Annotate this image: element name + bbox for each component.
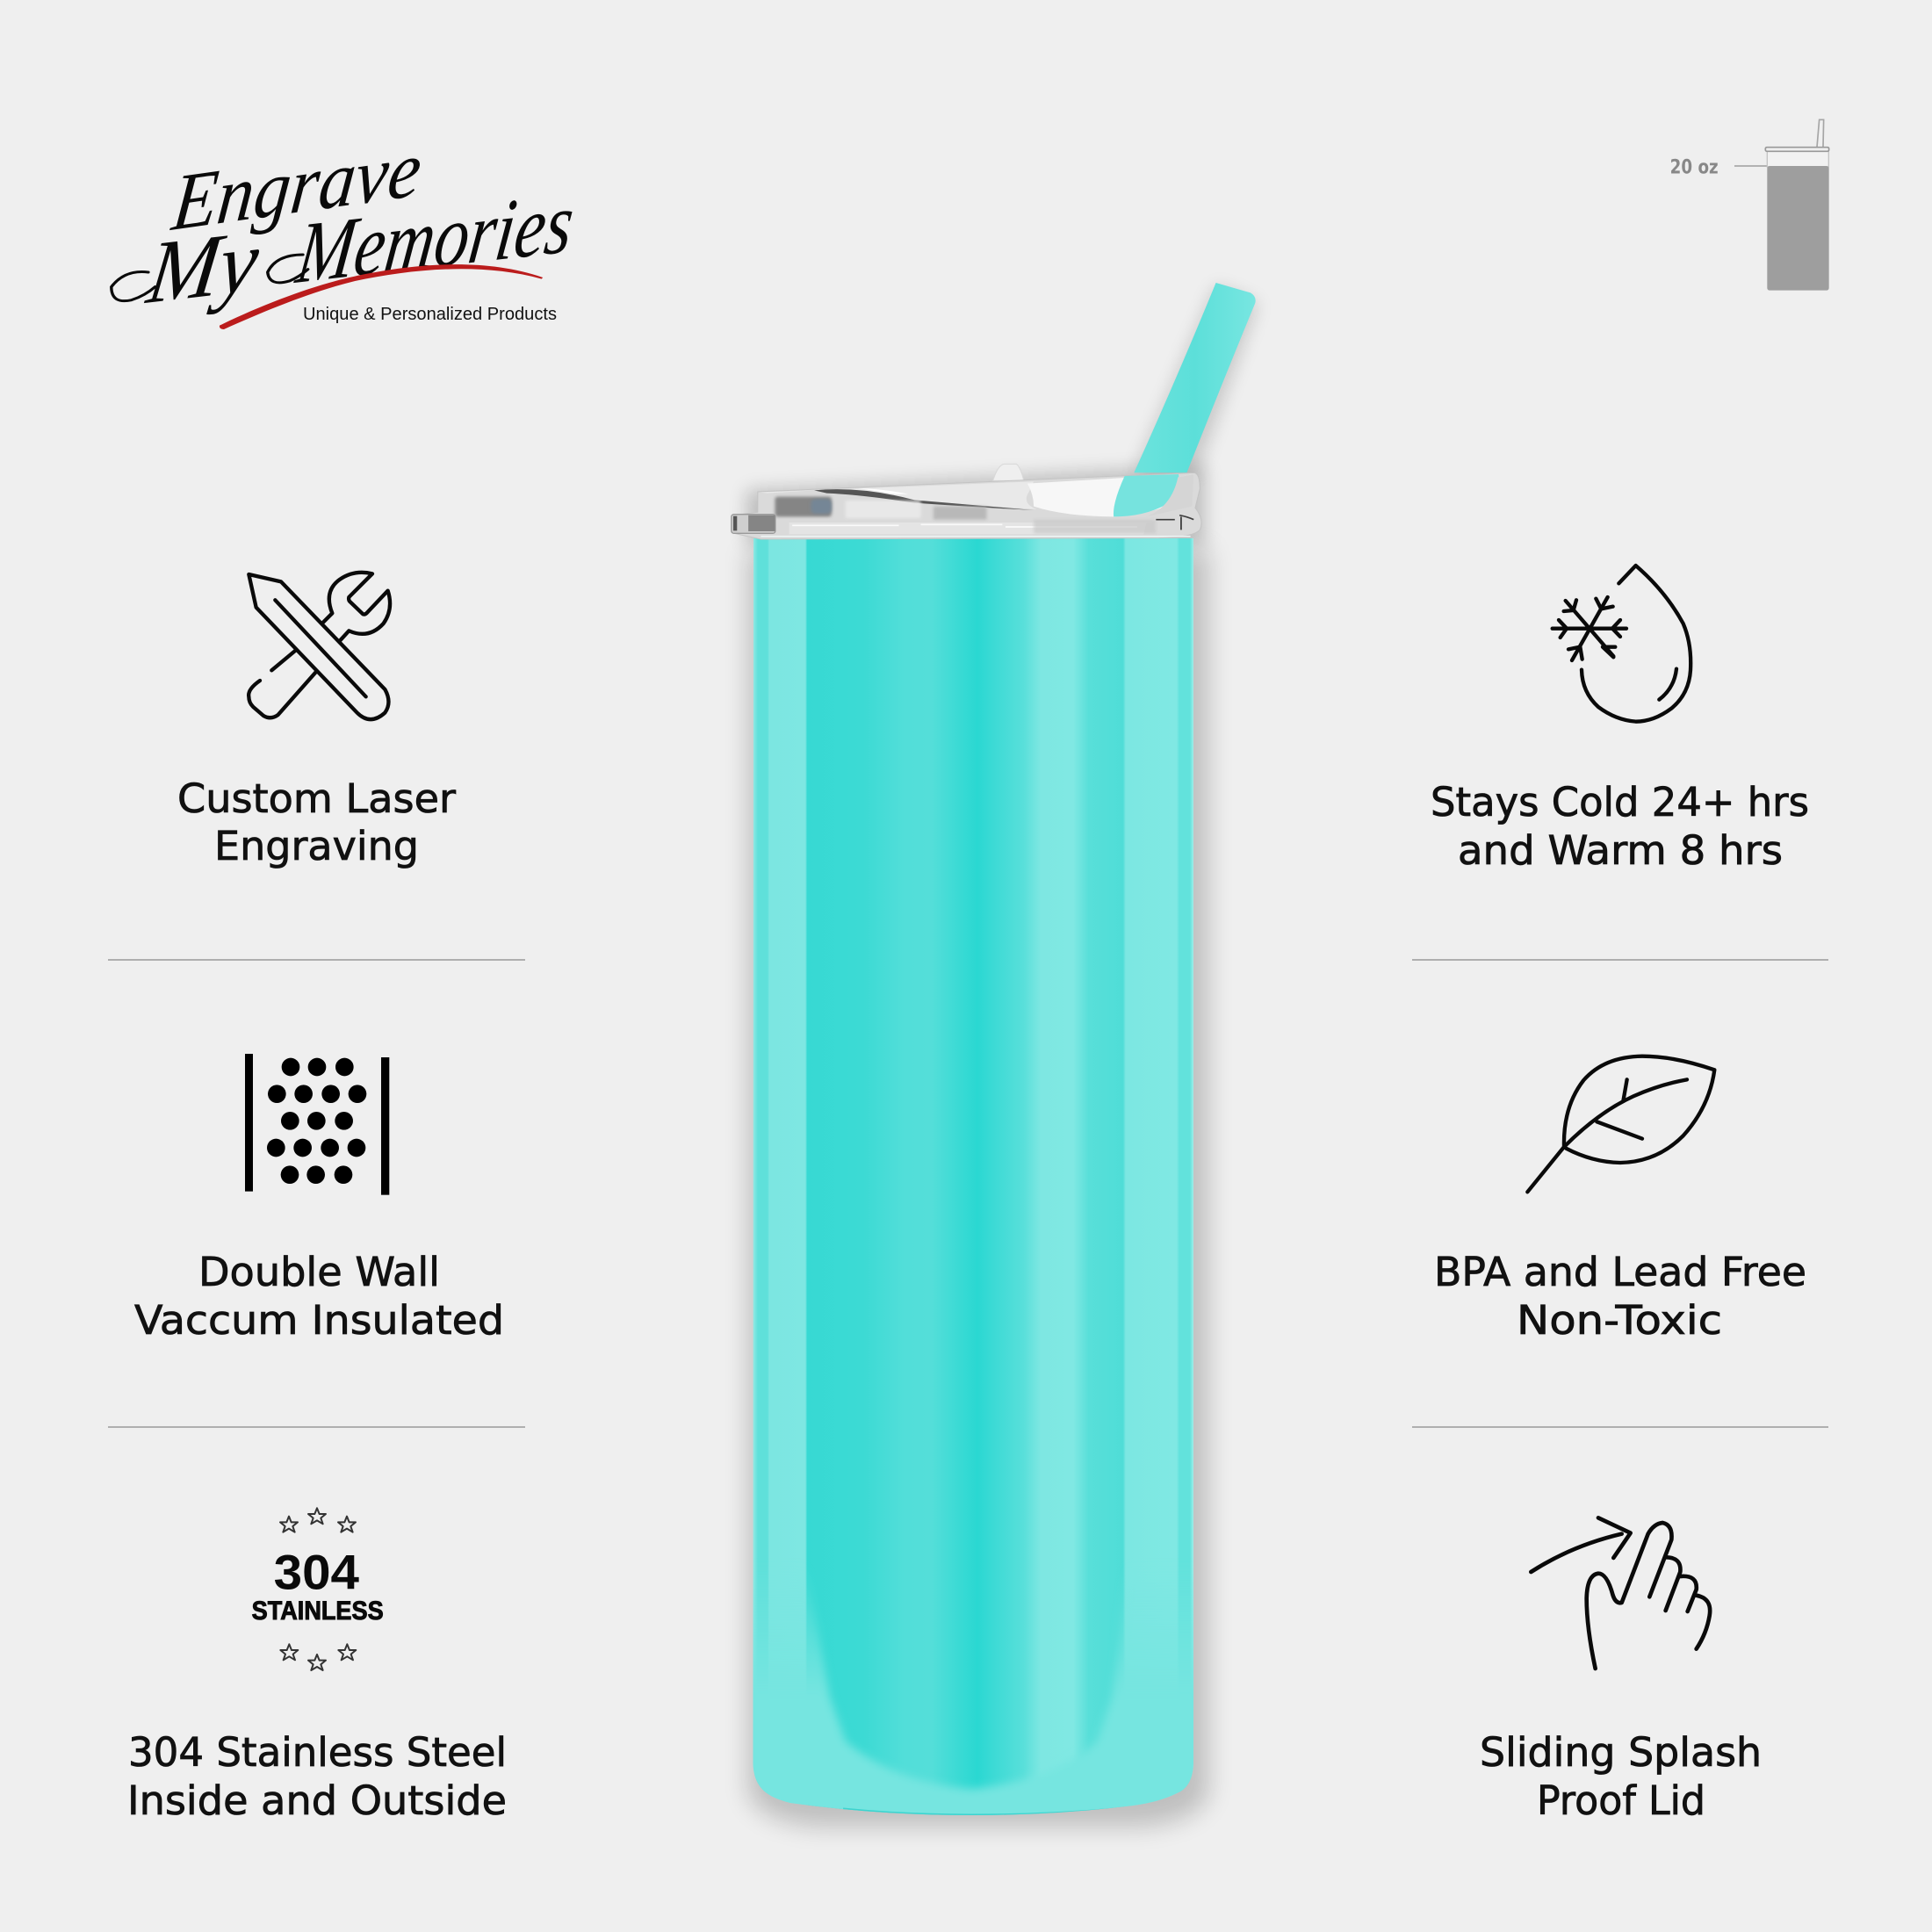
feature text: and Warm 8 hrs (1458, 827, 1783, 874)
badge stars (280, 1508, 356, 1670)
lid shell (732, 472, 1201, 539)
panel: temperature retention (1431, 566, 1809, 874)
feature text: Stays Cold 24+ hrs (1431, 779, 1809, 825)
feature text: Engraving (214, 823, 419, 869)
logo word: Memories: Memories (291, 173, 580, 302)
logo flourishes (112, 255, 308, 301)
feature text: Non-Toxic (1517, 1297, 1722, 1344)
lid pull tab (732, 515, 775, 533)
icon: 304 stainless badge (252, 1508, 384, 1670)
red swoosh (220, 264, 543, 329)
feature text: BPA and Lead Free (1434, 1249, 1806, 1295)
feature text: Vaccum Insulated (134, 1297, 504, 1344)
icon: crossed tools (249, 573, 390, 719)
feature text (1431, 779, 1809, 874)
panel: custom laser engraving (177, 573, 457, 869)
logo word: Engrave: Engrave (167, 124, 426, 248)
size label: 20 oz (1670, 157, 1719, 179)
panel: BPA and lead free (1434, 1056, 1806, 1344)
feature text: Inside and Outside (127, 1777, 507, 1824)
feature text: Sliding Splash (1480, 1729, 1762, 1776)
badge word: STAINLESS (252, 1597, 384, 1626)
feature text: 304 Stainless Steel (128, 1729, 507, 1776)
brand logo (112, 124, 580, 329)
feature text (127, 1729, 507, 1824)
infographic canvas (108, 119, 1830, 1838)
feature text (134, 1249, 504, 1344)
feature text (1480, 1729, 1762, 1824)
icon: swiping hand with arrow (1531, 1517, 1710, 1669)
tumbler silhouette (1765, 119, 1829, 291)
panel: double wall insulation (134, 1054, 504, 1344)
feature text: Double Wall (198, 1249, 440, 1295)
icon: snowflake and water drop (1553, 566, 1690, 722)
feature text: Proof Lid (1537, 1777, 1705, 1824)
panel: sliding splash proof lid (1480, 1517, 1762, 1824)
feature text (177, 775, 457, 869)
icon: double wall dots (245, 1054, 389, 1195)
tumbler product photo (732, 283, 1258, 1831)
straw (1134, 283, 1256, 472)
lid reflections (760, 474, 1193, 537)
badge number: 304 (274, 1545, 359, 1599)
clear sliding lid (732, 464, 1201, 539)
logo word: My: My (141, 211, 265, 322)
icon: leaf (1527, 1056, 1714, 1192)
logo tagline: Unique & Personalized Products (303, 305, 557, 324)
panel: 304 stainless steel (127, 1508, 507, 1824)
feature text (1434, 1249, 1806, 1344)
lid slider nub (993, 464, 1024, 480)
size diagram: 20 oz (1670, 119, 1829, 291)
tumbler body (738, 538, 1208, 1831)
tumbler shadow (746, 285, 1258, 1827)
feature text: Custom Laser (177, 775, 457, 822)
